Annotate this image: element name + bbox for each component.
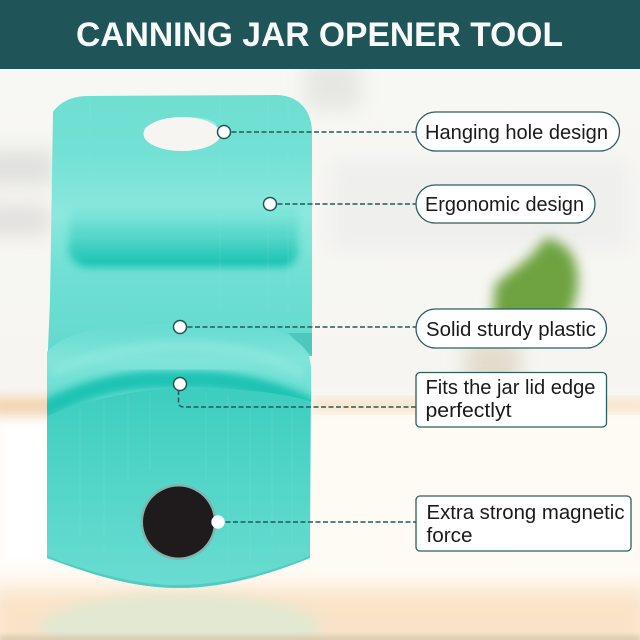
bottom rim (47, 556, 310, 588)
label: solid sturdy plastic (416, 309, 606, 348)
label: ergonomic design (416, 185, 595, 223)
curved lip (47, 334, 312, 416)
label: extra strong magnetic force (416, 496, 631, 551)
magnet (140, 484, 216, 560)
label: hanging hole design (416, 112, 620, 151)
label: solid sturdy plastic: Solid sturdy plastic (426, 319, 596, 341)
connector: sturdy plastic (174, 320, 416, 334)
jar opener tool (40, 95, 320, 588)
label: extra strong magnetic force: force (426, 525, 472, 547)
label: extra strong magnetic force: Extra strong magnetic (426, 502, 624, 524)
groove shadow (68, 205, 298, 267)
header bar (0, 0, 640, 69)
hanging hole (144, 117, 220, 151)
lower body (47, 372, 311, 588)
connector: magnet (212, 516, 416, 528)
upper body (47, 95, 312, 372)
title: CANNING JAR OPENER TOOL (76, 16, 563, 54)
connector: hanging hole (218, 126, 416, 138)
connector: jar lid edge (174, 378, 416, 407)
label: fits the jar lid edge: perfectlyt (426, 400, 512, 422)
label: fits the jar lid edge: Fits the jar lid edge (426, 377, 596, 399)
label: fits the jar lid edge (416, 372, 606, 427)
connector: ergonomic (264, 198, 416, 210)
right corner shade behind lip (288, 333, 312, 356)
label: ergonomic design: Ergonomic design (425, 194, 584, 216)
surface streaks (80, 100, 292, 565)
label: hanging hole design: Hanging hole design (425, 122, 608, 144)
